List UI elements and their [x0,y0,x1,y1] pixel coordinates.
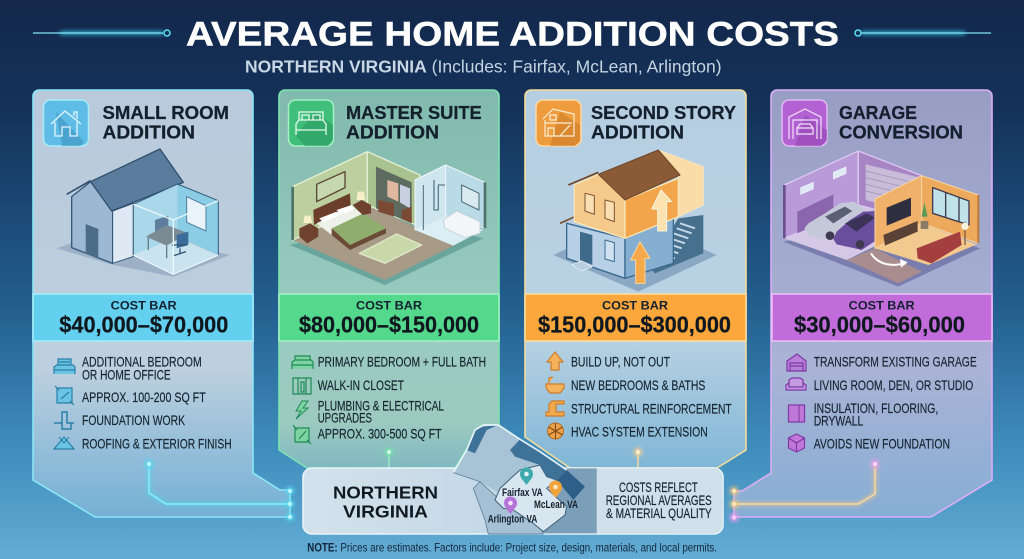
list item: hvac [548,423,708,440]
list item: insulation: DRYWALL [814,413,863,429]
list item: bathtub: NEW BEDROOMS & BATHS [571,377,705,393]
list item: bedroom [292,354,486,370]
costs note [606,479,712,521]
connector dot [634,448,642,468]
heading: SMALL ROOM [102,103,229,123]
map [453,425,597,534]
heading: ADDITION [591,122,684,142]
heading: GARAGE [839,103,917,123]
list item: cube [788,434,950,452]
cost bar [33,294,253,341]
list item: electrical [296,398,444,426]
card shape [734,90,992,517]
list item: electrical: PLUMBING & ELECTRICAL [318,398,444,414]
illustration: house with glass room [57,149,230,277]
connector end dots [286,487,738,522]
feature list [786,354,977,452]
icon: house [44,100,88,146]
feature list [54,354,232,451]
heading: MASTER SUITE [346,103,482,123]
list item: foundation [54,412,185,429]
illustration: second story [553,150,717,292]
region label [333,482,438,521]
region label: VIRGINIA [343,501,428,521]
list item: garage [787,354,977,371]
list item: cube: AVOIDS NEW FOUNDATION [814,435,950,451]
list item: roofing [54,435,232,451]
cost bar [525,294,746,341]
cost bar [772,294,992,341]
title: AVERAGE HOME ADDITION COSTS [186,16,839,54]
heading: ADDITION [346,122,439,142]
card shape [33,90,290,517]
costs note: COSTS REFLECT [619,479,698,495]
list item: insulation: INSULATION, FLOORING, [814,400,938,416]
list item: area [55,386,206,405]
list item: bedroom [54,354,202,382]
cost bar [279,294,499,341]
connector lines [145,460,879,504]
heading: SECOND STORY [591,103,736,123]
list item: structure [546,400,732,416]
panel: northern virginia map [303,425,723,534]
decorative left line [33,30,170,36]
pin: arlington [504,497,517,514]
list item: insulation [788,400,938,429]
cost bar: $30,000–$60,000 [794,312,965,338]
cost bar: $40,000–$70,000 [59,312,228,338]
cost bar: COST BAR [111,298,177,312]
subtitle: NORTHERN VIRGINIA (Includes: Fairfax, McLean, Arlington) [245,56,722,76]
heading [346,103,482,142]
costs note: & MATERIAL QUALITY [606,505,712,521]
map labels: Fairfax VA [502,487,543,499]
footnote: NOTE: Prices are estimates. Factors include: Project size, design, materials, and local permits. [307,541,717,555]
costs note: REGIONAL AVERAGES [606,492,712,508]
map labels [488,487,578,526]
list item: roofing: ROOFING & EXTERIOR FINISH [82,435,232,451]
panel: master suite addition [279,90,499,468]
header [33,16,991,76]
card shape [279,90,499,468]
list item: foundation: FOUNDATION WORK [82,412,185,428]
list item: bedroom: OR HOME OFFICE [82,366,171,382]
heading [591,103,736,142]
list item: sofa [786,377,973,393]
panel: second story addition [525,90,746,468]
right panel background [597,469,722,533]
feature list [292,354,486,444]
list item: bathtub [546,377,705,393]
panel: small room addition [33,90,290,517]
icon: floor plan house [536,100,581,146]
cost bar: $150,000–$300,000 [538,312,731,338]
list item: area [293,425,442,444]
icon: bed [288,100,334,146]
list item: bedroom: ADDITIONAL BEDROOM [82,354,202,370]
list item: up arrow [547,352,670,370]
panel box [303,468,723,534]
cost bar: $80,000–$150,000 [299,312,479,338]
pin: fairfax [520,468,533,485]
list item: structure: STRUCTURAL REINFORCEMENT [571,400,732,416]
list item: closet [293,377,404,394]
map labels: McLean VA [534,499,578,511]
list item: area: APPROX. 100-200 SQ FT [82,389,206,405]
illustration: bedroom and bath [290,152,485,285]
cost bar: COST BAR [602,298,668,312]
list item: closet: WALK-IN CLOSET [318,377,404,393]
illustration: garage and living room [783,151,980,287]
heading: CONVERSION [839,122,963,142]
icon: garage [782,100,827,146]
connector dot [385,448,393,468]
map labels: Arlington VA [488,514,537,526]
cost bar: COST BAR [849,298,915,312]
panel: garage conversion [734,90,992,517]
heading [102,103,229,142]
feature list [546,352,732,440]
list item: bedroom: PRIMARY BEDROOM + FULL BATH [318,354,486,370]
list item: sofa: LIVING ROOM, DEN, OR STUDIO [814,377,973,393]
heading [839,103,963,142]
card shape [525,90,746,468]
list item: up arrow: BUILD UP, NOT OUT [571,354,670,370]
list item: hvac: HVAC SYSTEM EXTENSION [571,424,708,440]
cost bar: COST BAR [356,298,422,312]
region label: NORTHERN [333,482,438,502]
list item: area: APPROX. 300-500 SQ FT [318,426,442,442]
pin: mclean [549,481,562,498]
decorative right line [855,30,991,36]
heading: ADDITION [102,122,195,142]
list item: electrical: UPGRADES [318,410,372,426]
